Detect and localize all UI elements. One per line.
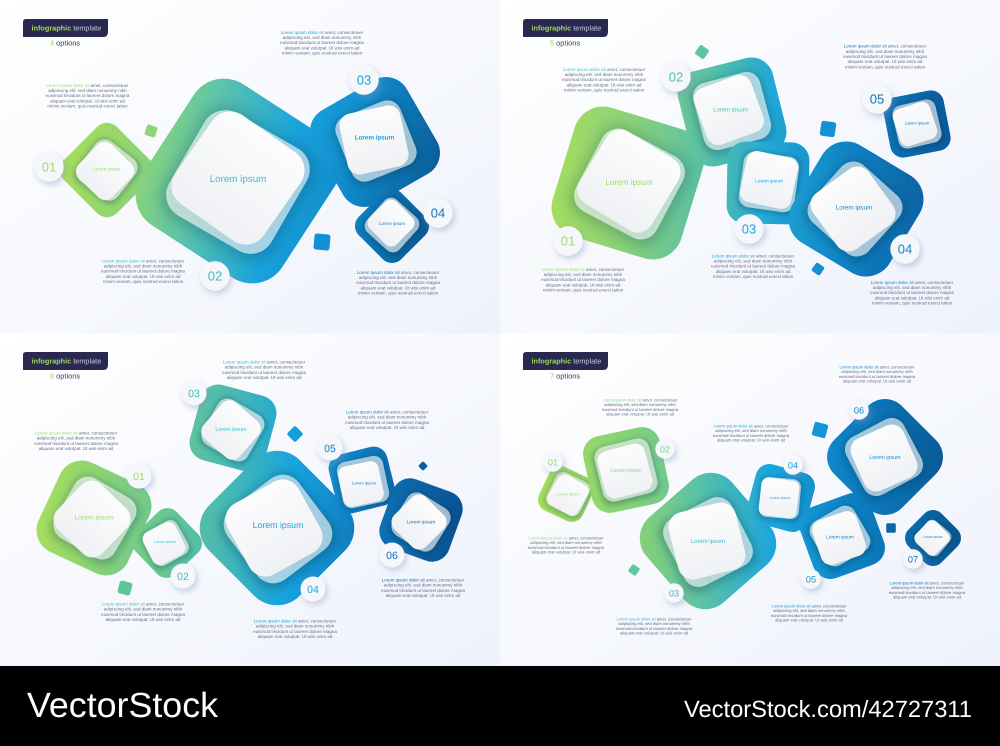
text block 01: adipiscing elit, sed diam nonummy nibh: [48, 88, 127, 93]
badge 01: 01: [561, 234, 575, 249]
text block 02: [602, 398, 679, 417]
shape 04: [350, 184, 434, 268]
badge 04: [783, 455, 803, 475]
badge 01: [34, 152, 64, 182]
badge 05: 05: [806, 574, 816, 584]
badge 02: [200, 261, 230, 291]
header: infographic template: 4 options: [50, 38, 80, 48]
text block 02: Lorem ipsum dolor sit amet, consectetuer: [102, 258, 185, 263]
badge 05: [862, 84, 892, 114]
text block 06: aliquam erat volutpat. Ut wisi enim ad: [386, 593, 461, 598]
header: infographic template: 5 options: [550, 38, 580, 48]
text block 06: [381, 578, 465, 598]
text block 01: minim veniam, quis nostrud exerci tation: [47, 104, 128, 109]
accent square: dark blue: [418, 461, 428, 471]
text block 03: adipiscing elit, sed diam nonummy nibh: [283, 35, 362, 40]
text block 07: adipiscing elit, sed diam nonummy nibh: [891, 585, 963, 590]
shape 03: [301, 68, 449, 216]
shape 04: [744, 461, 818, 535]
panel: 7 options: [500, 333, 1000, 666]
text block 01: euismod tincidunt ut laoreet dolore magna: [528, 545, 605, 550]
text block 03: adipiscing elit, sed diam nonummy nibh: [225, 365, 304, 370]
header: infographic template: 7 options: [550, 372, 580, 380]
shape 02: [122, 65, 354, 297]
text block 02: [101, 602, 185, 622]
text block 02: adipiscing elit, sed diam nonummy nibh: [565, 72, 644, 77]
text block 07: [889, 580, 966, 600]
text block 07: euismod tincidunt ut laoreet dolore magna: [889, 590, 966, 595]
text block 01: aliquam erat volutpat. Ut wisi enim ad: [39, 446, 114, 451]
text block 05: euismod tincidunt ut laoreet dolore magna: [771, 613, 848, 618]
text block 01: adipiscing elit, sed diam nonummy nibh: [530, 540, 602, 545]
accent square: green: [628, 564, 640, 576]
text block 02: euismod tincidunt ut laoreet dolore magna: [101, 269, 185, 274]
accent square: blue: [313, 233, 331, 251]
badge 02: [170, 564, 196, 588]
text block 04: euismod tincidunt ut laoreet dolore magna: [870, 290, 954, 295]
text block 05: [771, 604, 848, 623]
badge 05: 05: [324, 443, 336, 455]
text block 06: Lorem ipsum dolor sit amet, consectetuer: [839, 364, 915, 370]
shape 06: [374, 473, 468, 567]
shape 04: [186, 437, 368, 619]
badge 04: 04: [898, 242, 912, 257]
accent square: dark blue: [886, 523, 896, 533]
header: infographic template: infographic template: [32, 24, 101, 32]
text block 01: euismod tincidunt ut laoreet dolore magna: [541, 277, 625, 282]
text block 01: aliquam erat volutpat. Ut wisi enim ad: [546, 282, 621, 287]
shape 04: Lorem ipsum: [253, 520, 303, 530]
text block 04: euismod tincidunt ut laoreet dolore magna: [253, 629, 337, 634]
shape 03: Lorem ipsum: [355, 134, 395, 142]
shape 03: [726, 141, 810, 225]
shape 01: [29, 453, 159, 583]
text block 01: aliquam erat volutpat. Ut wisi enim ad: [50, 98, 125, 103]
text block 02: Lorem ipsum dolor sit amet, consectetuer: [563, 67, 646, 72]
shape 07: [900, 505, 966, 571]
text block 05: Lorem ipsum dolor sit amet, consectetuer: [844, 44, 927, 49]
text block 04: Lorem ipsum dolor sit amet, consectetuer: [713, 424, 789, 428]
shape 02: [580, 424, 672, 516]
text block 05: adipiscing elit, sed diam nonummy nibh: [846, 49, 925, 54]
text block 03: euismod tincidunt ut laoreet dolore magna: [711, 264, 795, 269]
text block 02: [101, 258, 185, 284]
footer banner: [0, 666, 1000, 746]
text block 03: Lorem ipsum dolor sit amet, consectetuer: [223, 360, 306, 365]
shape 06: [817, 389, 953, 525]
header: infographic template: infographic template: [32, 356, 101, 366]
shape 07: Lorem ipsum: [923, 535, 943, 539]
text block 01: Lorem ipsum dolor sit amet, consectetuer: [35, 431, 118, 436]
text block 07: Lorem ipsum dolor sit amet, consectetuer: [889, 580, 965, 586]
badge 02: 02: [177, 571, 189, 583]
header: infographic template: [523, 19, 608, 48]
text block 06: adipiscing elit, sed diam nonummy nibh: [384, 583, 463, 588]
text block 03: [711, 253, 795, 279]
text block 01: [34, 431, 118, 451]
shape 05: [794, 488, 890, 584]
text block 01: aliquam erat volutpat. Ut wisi enim ad: [532, 550, 601, 555]
badge 01: 01: [42, 160, 56, 175]
shape 05: Lorem ipsum: [826, 534, 854, 540]
text block 04: adipiscing elit, sed diam nonummy nibh: [873, 285, 952, 290]
text block 06: aliquam erat volutpat. Ut wisi enim ad: [843, 379, 912, 384]
text block 04: minim veniam, quis nostrud exerci tation: [358, 291, 439, 296]
shape 05: Lorem ipsum: [905, 120, 930, 125]
text block 02: Lorem ipsum dolor sit amet, consectetuer: [602, 398, 678, 402]
text block 03: Lorem ipsum dolor sit amet, consectetuer: [712, 253, 795, 258]
text block 04: euismod tincidunt ut laoreet dolore magna: [356, 280, 440, 285]
shape 06: Lorem ipsum: [407, 520, 435, 526]
panel: 5 options: [500, 0, 1000, 333]
badge 01: 01: [548, 457, 558, 467]
text block 02: euismod tincidunt ut laoreet dolore magna: [562, 77, 646, 82]
header: infographic template: infographic template: [532, 356, 601, 366]
badge 03: [182, 380, 206, 406]
text block 05: aliquam erat volutpat. Ut wisi enim ad: [848, 59, 923, 64]
header: infographic template: infographic template: [532, 24, 601, 32]
text block 02: euismod tincidunt ut laoreet dolore magna: [101, 612, 185, 617]
text block 03: aliquam erat volutpat. Ut wisi enim ad: [227, 375, 302, 380]
text block 02: euismod tincidunt ut laoreet dolore magna: [602, 407, 679, 412]
text block 01: Lorem ipsum dolor sit amet, consectetuer: [528, 536, 604, 540]
shape 01: Lorem ipsum: [556, 491, 580, 496]
shape 01: Lorem ipsum: [93, 166, 120, 172]
text block 05: [843, 44, 927, 69]
text block 01: Lorem ipsum dolor sit amet, consectetuer: [46, 83, 129, 88]
footer banner: VectorStock: [27, 686, 219, 725]
text block 04: aliquam erat volutpat. Ut wisi enim ad: [258, 634, 333, 639]
text block 04: aliquam erat volutpat. Ut wisi enim ad: [875, 295, 950, 300]
badge 07: [903, 549, 923, 569]
shape 02: Lorem ipsum: [610, 468, 642, 474]
shape 06: Lorem ipsum: [869, 455, 901, 461]
text block 05: adipiscing elit, sed diam nonummy nibh: [348, 415, 427, 420]
badge 02: 02: [660, 444, 670, 454]
badge 03: 03: [357, 73, 371, 88]
text block 04: Lorem ipsum dolor sit amet, consectetuer: [254, 619, 337, 624]
text block 04: Lorem ipsum dolor sit amet, consectetuer: [357, 270, 440, 275]
header: infographic template: [23, 352, 108, 380]
text block 05: minim veniam, quis nostrud exerci tation: [845, 64, 926, 69]
text block 01: [46, 83, 130, 109]
text block 02: adipiscing elit, sed diam nonummy nibh: [104, 263, 183, 268]
badge 04: [890, 234, 920, 264]
text block 06: adipiscing elit, sed diam nonummy nibh: [841, 369, 913, 374]
text block 02: aliquam erat volutpat. Ut wisi enim ad: [567, 82, 642, 87]
accent square: green: [117, 580, 133, 596]
shape 02: Lorem ipsum: [154, 540, 176, 544]
badge 04: 04: [307, 584, 319, 596]
text block 04: adipiscing elit, sed diam nonummy nibh: [359, 275, 438, 280]
badge 07: 07: [908, 554, 918, 564]
text block 01: minim veniam, quis nostrud exerci tation: [543, 288, 624, 293]
footer banner: VectorStock.com/42727311: [684, 696, 972, 722]
accent square: small blue: [811, 262, 825, 276]
text block 05: euismod tincidunt ut laoreet dolore magna: [345, 420, 429, 425]
badge 02: 02: [208, 269, 222, 284]
shape 03: Lorem ipsum: [215, 427, 247, 433]
shape 04: Lorem ipsum: [770, 496, 790, 500]
text block 01: adipiscing elit, sed diam nonummy nibh: [37, 436, 116, 441]
text block 03: adipiscing elit, sed diam nonummy nibh: [618, 621, 690, 626]
panel: 4 options: [0, 0, 500, 333]
text block 03: aliquam erat volutpat. Ut wisi enim ad: [716, 269, 791, 274]
text block 03: aliquam erat volutpat. Ut wisi enim ad: [285, 45, 360, 50]
badge 01: 01: [133, 471, 145, 483]
text block 01: adipiscing elit, sed diam nonummy nibh: [544, 272, 623, 277]
shape 04: Lorem ipsum: [379, 221, 405, 226]
shape 03: Lorem ipsum: [755, 178, 783, 184]
text block 02: [562, 67, 646, 93]
badge 04: 04: [431, 206, 445, 221]
text block 03: [280, 30, 364, 56]
text block 06: euismod tincidunt ut laoreet dolore magna: [381, 588, 465, 593]
text block 02: aliquam erat volutpat. Ut wisi enim ad: [606, 412, 675, 417]
text block 03: euismod tincidunt ut laoreet dolore magna: [222, 370, 306, 375]
text block 02: minim veniam, quis nostrud exerci tation: [103, 279, 184, 284]
shape 05: [326, 444, 398, 516]
accent square: blue: [287, 426, 303, 442]
text block 02: adipiscing elit, sed diam nonummy nibh: [604, 402, 676, 407]
accent square: green: [144, 124, 158, 138]
text block 04: [870, 280, 954, 306]
text block 04: [253, 619, 337, 639]
shape 01: [544, 99, 712, 267]
badge 06: [849, 400, 869, 420]
text block 06: Lorem ipsum dolor sit amet, consectetuer: [382, 578, 465, 583]
shape 02: [127, 503, 207, 583]
shape 01: [54, 117, 160, 223]
shape 05: Lorem ipsum: [352, 480, 377, 485]
text block 04: minim veniam, quis nostrud exerci tation: [872, 301, 953, 306]
text block 05: Lorem ipsum dolor sit amet, consectetuer: [771, 604, 847, 608]
text block 02: adipiscing elit, sed diam nonummy nibh: [104, 607, 183, 612]
text block 01: euismod tincidunt ut laoreet dolore magna: [34, 441, 118, 446]
text block 03: aliquam erat volutpat. Ut wisi enim ad: [620, 631, 689, 636]
text block 02: aliquam erat volutpat. Ut wisi enim ad: [106, 274, 181, 279]
shape 02: [673, 53, 791, 171]
text block 03: euismod tincidunt ut laoreet dolore magna: [616, 626, 693, 631]
text block 03: [616, 616, 693, 636]
shape 02: Lorem ipsum: [713, 106, 748, 114]
text block 03: minim veniam, quis nostrud exerci tation: [713, 274, 794, 279]
badge 05: 05: [870, 92, 884, 107]
text block 04: aliquam erat volutpat. Ut wisi enim ad: [361, 285, 436, 290]
text block 05: aliquam erat volutpat. Ut wisi enim ad: [350, 425, 425, 430]
badge 03: 03: [669, 588, 679, 598]
text block 03: Lorem ipsum dolor sit amet, consectetuer: [281, 30, 364, 35]
header: infographic template: 6 options: [50, 372, 80, 380]
text block 04: adipiscing elit, sed diam nonummy nibh: [715, 428, 787, 433]
accent square: blue: [811, 421, 829, 439]
badge 02: [661, 62, 691, 92]
badge 05: [801, 569, 821, 589]
text block 01: euismod tincidunt ut laoreet dolore magna: [46, 93, 130, 98]
accent square: teal: [694, 44, 710, 60]
badge 01: [126, 464, 152, 488]
text block 02: Lorem ipsum dolor sit amet, consectetuer: [102, 602, 185, 607]
shape 03: [628, 461, 788, 621]
text block 05: euismod tincidunt ut laoreet dolore magna: [843, 54, 927, 59]
badge 03: 03: [188, 388, 200, 400]
badge 01: [543, 452, 563, 472]
badge 03: [734, 214, 764, 244]
badge 03: [664, 583, 684, 603]
text block 05: Lorem ipsum dolor sit amet, consectetuer: [346, 410, 429, 415]
text block 01: [541, 267, 625, 293]
accent square: blue: [820, 121, 836, 137]
text block 04: aliquam erat volutpat. Ut wisi enim ad: [717, 438, 786, 443]
badge 02: 02: [669, 70, 683, 85]
shape 01: [534, 462, 598, 526]
header: infographic template: [23, 19, 108, 48]
text block 03: adipiscing elit, sed diam nonummy nibh: [714, 258, 793, 263]
text block 05: [345, 410, 429, 430]
badge 02: [655, 439, 675, 459]
text block 03: [222, 360, 306, 380]
text block 02: aliquam erat volutpat. Ut wisi enim ad: [106, 617, 181, 622]
text block 04: adipiscing elit, sed diam nonummy nibh: [256, 624, 335, 629]
text block 06: euismod tincidunt ut laoreet dolore magna: [839, 374, 916, 379]
shape 01: Lorem ipsum: [605, 178, 653, 187]
badge 04: [423, 198, 453, 228]
badge 06: 06: [854, 405, 864, 415]
shape 03: [185, 380, 281, 476]
text block 07: aliquam erat volutpat. Ut wisi enim ad: [893, 595, 962, 600]
text block 01: [528, 536, 605, 555]
badge 01: [553, 226, 583, 256]
text block 05: aliquam erat volutpat. Ut wisi enim ad: [775, 618, 844, 623]
shape 02: Lorem ipsum: [210, 174, 266, 185]
badge 05: [318, 436, 342, 460]
shape 04: Lorem ipsum: [836, 204, 872, 212]
badge 06: [380, 542, 404, 568]
badge 03: [349, 65, 379, 95]
badge 06: 06: [386, 550, 398, 562]
text block 01: Lorem ipsum dolor sit amet, consectetuer: [542, 267, 625, 272]
shape 03: Lorem ipsum: [691, 538, 725, 545]
text block 05: adipiscing elit, sed diam nonummy nibh: [773, 608, 845, 613]
text block 03: minim veniam, quis nostrud exerci tation: [282, 51, 363, 56]
badge 04: [300, 576, 326, 602]
header: infographic template: [523, 352, 608, 380]
shape 05: [881, 88, 953, 160]
panel: 6 options: [0, 333, 500, 666]
badge 03: 03: [742, 222, 756, 237]
text block 02: minim veniam, quis nostrud exerci tation: [564, 88, 645, 93]
text block 04: euismod tincidunt ut laoreet dolore magna: [713, 433, 790, 438]
text block 03: Lorem ipsum dolor sit amet, consectetuer: [616, 616, 692, 622]
text block 06: [839, 364, 916, 384]
badge 04: 04: [788, 460, 798, 470]
shape 01: Lorem ipsum: [74, 514, 114, 521]
text block 03: euismod tincidunt ut laoreet dolore magna: [280, 40, 364, 45]
text block 04: [713, 424, 790, 443]
text block 04: Lorem ipsum dolor sit amet, consectetuer: [871, 280, 954, 285]
text block 04: [356, 270, 440, 296]
shape 04: [778, 131, 934, 287]
